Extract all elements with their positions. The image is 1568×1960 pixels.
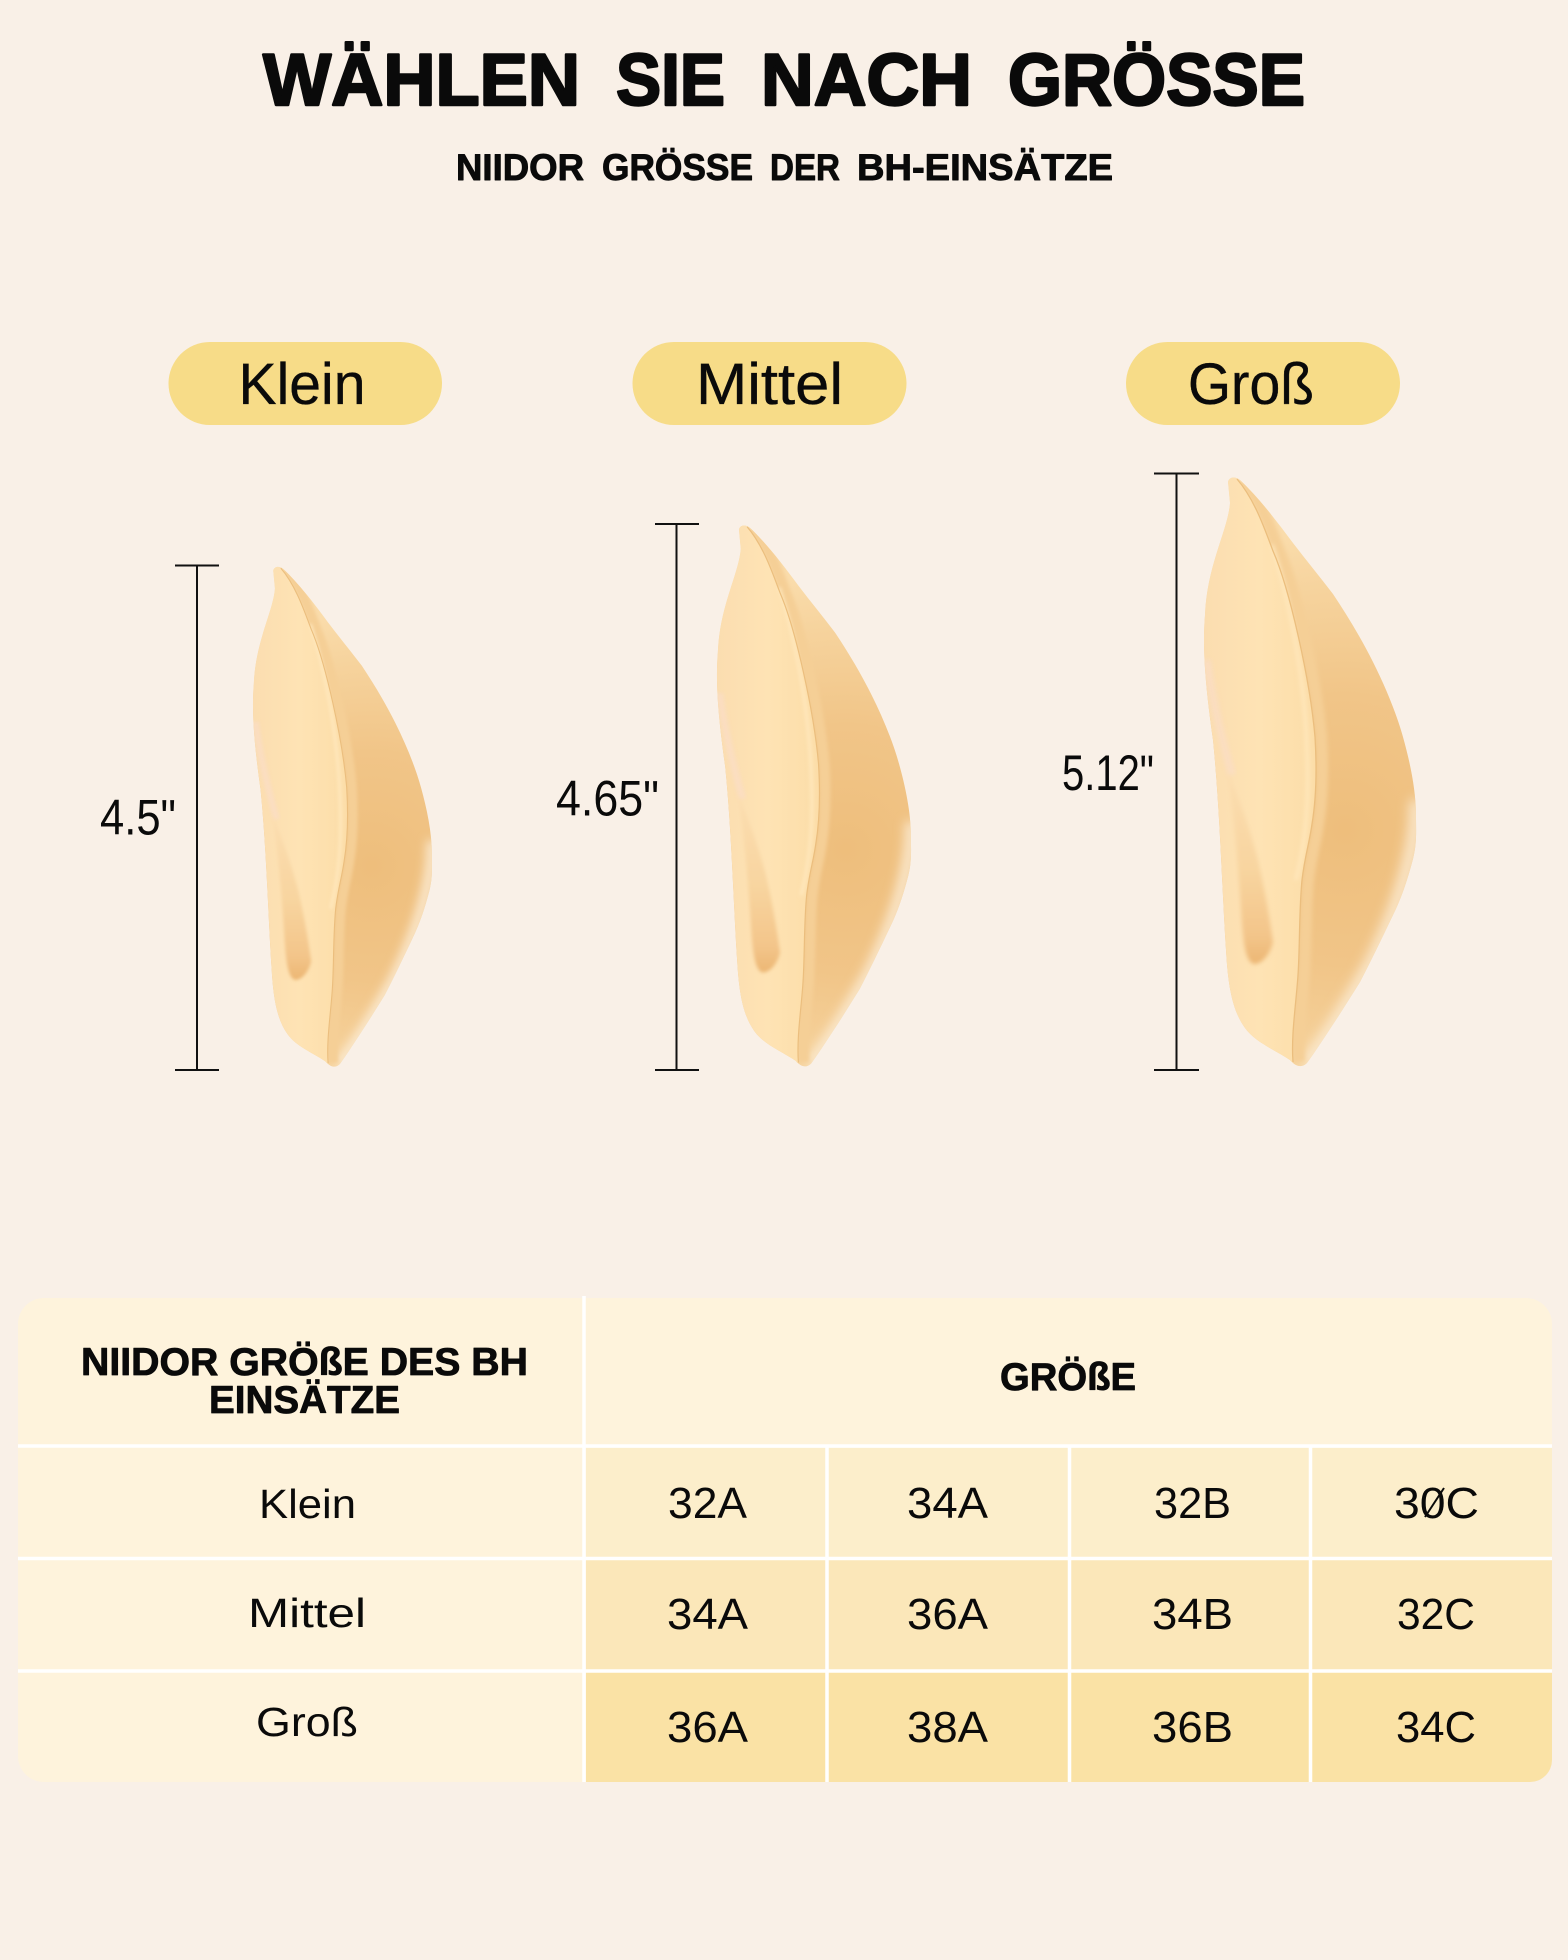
row values: Groß bbox=[667, 1703, 1476, 1752]
row values: Klein: 32B bbox=[1154, 1479, 1231, 1528]
row 3 cells bbox=[586, 1672, 1552, 1782]
label pill: Mittel bbox=[632, 342, 906, 425]
row values: Groß: 36B bbox=[1152, 1703, 1233, 1752]
row 1 cells bbox=[586, 1448, 1552, 1558]
label pill: Groß bbox=[1126, 342, 1400, 425]
title: GRÖSSE bbox=[1008, 40, 1305, 121]
dimension line: 5.12 inches bbox=[1154, 474, 1199, 1070]
row label: Mittel: Mittel bbox=[248, 1590, 366, 1636]
row values: Klein bbox=[668, 1479, 1479, 1528]
row values: Mittel: 34B bbox=[1152, 1590, 1233, 1639]
row values: Mittel: 34A bbox=[667, 1590, 749, 1639]
panel: Klein size bbox=[100, 342, 442, 1074]
row values: Groß: 38A bbox=[907, 1703, 989, 1752]
row label: Klein: Klein bbox=[259, 1481, 356, 1527]
row 2 cells bbox=[586, 1559, 1552, 1671]
illustration: medium bra insert bbox=[709, 519, 919, 1075]
row values: Groß: 34C bbox=[1396, 1703, 1476, 1752]
table header: left: NIIDOR GRÖßE DES BH bbox=[81, 1341, 528, 1384]
dimension label: 4.5 inches: 4.5" bbox=[100, 790, 176, 846]
row values: Mittel: 32C bbox=[1397, 1590, 1475, 1639]
label pill: Klein bbox=[168, 342, 442, 425]
dimension line: 4.5 inches bbox=[175, 566, 219, 1070]
label pill: Mittel: Mittel bbox=[696, 352, 843, 417]
table header: right: GRÖßE bbox=[1000, 1356, 1136, 1399]
illustration: small bra insert bbox=[245, 561, 440, 1074]
row values: Klein: 34A bbox=[907, 1479, 989, 1528]
panel: Mittel size bbox=[556, 342, 919, 1075]
table header: left: EINSÄTZE bbox=[209, 1379, 400, 1422]
row values: Groß: 36A bbox=[667, 1703, 749, 1752]
table background bbox=[18, 1298, 1552, 1782]
subtitle: NIIDOR bbox=[456, 147, 584, 188]
panel: Groß size bbox=[1062, 342, 1425, 1075]
row values: Mittel: 36A bbox=[907, 1590, 989, 1639]
dimension label: 4.65 inches: 4.65" bbox=[556, 770, 659, 826]
title: NACH bbox=[761, 40, 972, 121]
title: WÄHLEN bbox=[263, 40, 580, 121]
illustration: large bra insert bbox=[1195, 470, 1425, 1075]
row label: Groß: Groß bbox=[256, 1699, 358, 1745]
row values: Klein: 30C bbox=[1394, 1479, 1479, 1528]
dimension label: 5.12 inches: 5.12" bbox=[1062, 745, 1154, 801]
row values: Mittel bbox=[667, 1590, 1475, 1639]
title: SIE bbox=[616, 40, 725, 121]
label pill: Klein: Klein bbox=[238, 352, 366, 417]
subtitle: GRÖSSE bbox=[602, 147, 753, 188]
label pill: Groß: Groß bbox=[1188, 352, 1314, 417]
subtitle: DER bbox=[770, 147, 840, 188]
dimension line: 4.65 inches bbox=[655, 524, 699, 1070]
size table bbox=[18, 1296, 1552, 1782]
row values: Klein: 32A bbox=[668, 1479, 748, 1528]
subtitle: BH-EINSÄTZE bbox=[857, 147, 1113, 188]
